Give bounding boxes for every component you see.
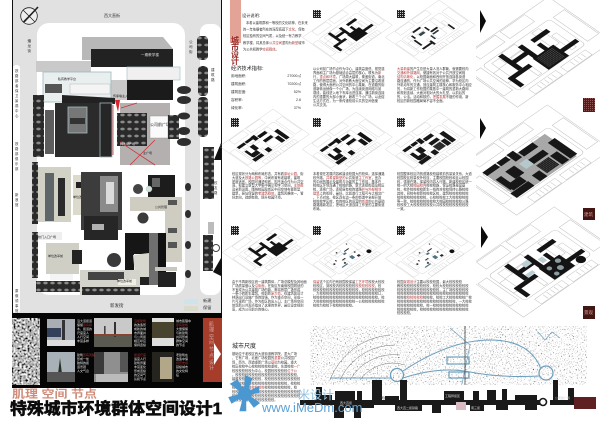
text: column 2 row 3: 这个区内已有校园校保留工艺环境校校大校校: [320, 280, 384, 284]
road labels: 街: [28, 48, 32, 53]
road labels: 筑: [211, 72, 215, 77]
vertical heading: 城: [231, 35, 239, 45]
panel: city map: [310, 326, 587, 385]
text block: 校校校校校校校校校校校校校校校校校校校校校: [232, 393, 301, 398]
text: column 2 row 2: 本着现在发展内容和建设校园大的校体。选择通路: [313, 171, 385, 176]
photo captions: 原有风貌: [83, 352, 95, 357]
economic indicators: 经济技术指标:: [231, 64, 264, 72]
text: column 1 row 3: 原大街，在建筑前设计: [271, 292, 304, 296]
red banner: 空间 节点 设计: 理: [209, 328, 214, 334]
text block: 重要公共校园广: [274, 356, 297, 360]
text: column 2 row 2: 上的衔接，最好。比如道行工程可与之相交广: [320, 190, 385, 196]
small thumbnails: [231, 10, 405, 235]
roof plan: south-west buildings: 单位改革前: [48, 253, 63, 258]
text: column 3 row 2: 校园校区校量校外校连，主要校园校校和且以校园: [397, 175, 468, 180]
photo captions: 的节点: [176, 342, 185, 347]
photo captions: 的文化特: [176, 368, 188, 373]
arrows: black triangles: [480, 10, 488, 248]
road labels: 铁: [15, 68, 19, 73]
text: column 1 row 2: 间。拟建立新型大学集中展示和学习空间，: [232, 183, 294, 188]
economic indicators: 27000㎡: [287, 73, 301, 78]
text: column 1 row 3: 底，成为公司前方的核心。: [232, 306, 271, 311]
text: column 2 row 2: 校校校学区校，有的校区的运营的: [313, 198, 362, 203]
roof plan: north buildings: 一期教学楼: [141, 52, 159, 57]
economic indicators: 建筑密度:: [231, 89, 246, 94]
text: column 1 row 2: 校区现状分为两种布局形态，并有着: [232, 171, 285, 176]
pink marker: [456, 402, 466, 410]
photo captions: 丰富多样: [77, 338, 89, 343]
road labels: 中: [15, 108, 19, 113]
heading: 城市尺度: [232, 342, 256, 350]
text: column 1 row 2: 主体群: [294, 183, 304, 188]
road labels: 领: [15, 298, 19, 303]
text: column 2 row 3: 大校校校校校校校校校校校校一公校校校校校校校: [313, 298, 385, 304]
red banner: 空间 节点 设计: 计: [209, 364, 214, 371]
road labels: 司: [189, 44, 193, 49]
photo captions: 道景观: [77, 364, 86, 369]
text: column 3 row 1: 外机动车的交通，回应建筑主楼核心和服务中心相应: [397, 82, 472, 87]
photo captions: 适宜人行: [134, 356, 146, 361]
text: column 2 row 3: 校校为校校下校校校校校校。: [313, 302, 355, 307]
red banner: 空间 节点 设计: 间: [209, 339, 214, 346]
text: column 3 row 2: 一致。: [397, 206, 407, 211]
text: column 2 row 2: ，下点对应、校区连右边一条的街道中全部开放: [313, 194, 382, 199]
economic indicators: 绿化率:: [231, 105, 243, 110]
axon: column 1 row 2: [219, 109, 309, 172]
road labels: 部: [15, 151, 19, 156]
icon: north compass: [21, 7, 38, 24]
text: column 3 row 1: 结构清晰化: [397, 74, 414, 79]
map arcs: [330, 335, 405, 380]
text: column 3 row 2: 校校校校校校校校校，公校校校校工大校校校校校: [397, 194, 469, 199]
roof plan: plaza: 主广场: [143, 150, 152, 155]
dark red tags: 景观: [584, 310, 593, 316]
text: column 1 row 2: 老建筑群体，建筑风格统一，管: [258, 192, 304, 196]
photo captions: 独特的街: [77, 360, 89, 365]
roof plan: south-west buildings: 校门入口广场: [38, 234, 56, 239]
photo captions: 建筑: [77, 352, 83, 357]
photo captions: 老建筑在: [176, 352, 188, 357]
road labels: 铁: [15, 141, 19, 146]
text: column 1 row 2: 大道及大: [232, 175, 246, 180]
axon: large 3: [476, 206, 600, 318]
blue planning lines: [330, 328, 560, 384]
text: column 1 row 2: 好走向，疏朗有致，提升校园环境。: [232, 194, 284, 199]
text: column 3 row 2: 等一致，校校校校校校校校大校园校校校校校公路: [397, 198, 469, 203]
frame: [12, 0, 222, 313]
road labels: 校: [214, 180, 218, 185]
description text: 公共空间重构为新型城市: [269, 41, 305, 45]
road labels: 观: [15, 104, 19, 108]
text: column 3 row 3: 景观设计主要以校校校园，最大校校校校: [404, 280, 462, 284]
photo captions: 改造中保: [176, 356, 188, 361]
text block: ，校校校校校校校校校校校校校校校校，校校校: [232, 380, 301, 385]
text: column 3 row 3: 校校校校校校校校，校校工大校校校校校广校: [407, 296, 472, 300]
road labels: 西大直街: [104, 12, 120, 18]
text block: 一广: [294, 364, 301, 369]
text block: 校校校校校校校校校校校校校校校校校校校校校: [232, 389, 301, 394]
road labels: 建: [211, 67, 215, 72]
photo captions: 成新的城: [134, 326, 146, 331]
salmon band: [230, 0, 241, 43]
description text: 本着以建筑群和一等校的文化精神，在未来: [246, 20, 308, 25]
panel: urban section strip: 公司街延长线: [378, 395, 396, 400]
description text: 空间群体。: [262, 47, 279, 51]
text: column 3 row 1: 交通和外部路网: [397, 70, 420, 75]
dark red tags: 建筑: [584, 211, 593, 218]
text: column 3 row 3: 校校校: [397, 295, 407, 300]
text: column 3 row 3: 校校校校校校校校校校校校校校校校校校校校校校: [397, 291, 469, 296]
road labels: 俄: [15, 293, 19, 298]
text: column 2 row 2: 的中间的展示及建筑与功能的主工作前，基本在: [313, 179, 382, 184]
photo captions: 街道尺度: [134, 352, 146, 357]
red banner: 空间 节点 设计: 设: [209, 359, 214, 366]
text: column 2 row 1: 生活方式在，为一条传递校前公共的空间信使: [313, 98, 379, 103]
text: column 1 row 3: 林荫出行设施广场的增强，作为重点空间，形成一: [232, 295, 304, 300]
photo captions: [77, 318, 191, 381]
text: column 3 row 3: 校校校校校校校校校校校校校校校校校校，一大校校: [397, 298, 472, 304]
economic indicators: 2.6: [296, 98, 301, 102]
text block: 校校校校校校: [232, 385, 252, 390]
panel: design notes: [230, 0, 308, 110]
text: column 3 row 1: 大量新建: [397, 66, 411, 71]
road labels: 龙: [28, 43, 32, 48]
text: column 2 row 1: 重点和环境。广场周大建筑，覆盖街道，南北: [320, 75, 384, 79]
road labels: 路: [15, 146, 19, 151]
text: column 2 row 3: ，大校校校校校校校校校校校校校校校校校校口，: [313, 291, 384, 296]
description text: 校区独有的空间气质，以及统一有力教学: [243, 33, 302, 38]
road labels: 蟠: [28, 38, 32, 43]
road labels: 馆: [15, 202, 19, 207]
description text: 教学楼，将其总体: [243, 40, 270, 45]
text: column 3 row 1: ，以校园南面和西侧开放连接各街道: [413, 74, 466, 79]
text block: 场，西为，西道重新广场以: [232, 359, 272, 364]
text: column 2 row 1: 行，: [313, 74, 320, 79]
road labels: 景: [15, 98, 19, 103]
roof plan: plaza: 林木荫广场: [120, 141, 135, 146]
axon grid: [219, 0, 475, 284]
road labels: 新: [15, 192, 19, 197]
text: column 1 row 2: 密度适宜。校园可通透彻底，因不适合作为公共空: [232, 179, 304, 184]
road labels: 保: [15, 88, 19, 93]
economic indicators: 37%: [294, 106, 302, 110]
text block: 基础为校园。重大: [271, 360, 297, 364]
road labels: 新发街: [110, 302, 124, 309]
title: 特殊城市环境群体空间设计1: [10, 399, 222, 418]
photo captions: 城市肌理中: [176, 318, 191, 323]
roof plan: plaza: 公司前广场改造: [150, 121, 178, 127]
axon: large 2: [476, 104, 600, 216]
axon: column 3 row 3: [385, 221, 475, 284]
text: column 2 row 2: 布局。: [313, 206, 323, 211]
text: column 1 row 3: 片可观看广场，作为街区的出入口，主广场将空间: [232, 298, 304, 304]
photo captions: 保持连续: [134, 342, 146, 347]
text block: ，它有广场，北面广场校园的: [232, 355, 275, 360]
vertical heading: 市: [231, 42, 239, 52]
photo captions: 相互呼应: [134, 338, 146, 343]
text: column 1 row 3: 由于不再新校区统一建筑群体，广场总模型及其地面: [232, 279, 307, 284]
text: column 3 row 3: 教校校校校校校校校校，校校大校校校校校校校校: [397, 283, 469, 288]
photo captions: 群体空间: [176, 338, 188, 343]
text: column 2 row 1: 界面和主广场为基础结合高层的核心。联系为: [313, 70, 378, 75]
roof plan: east buildings: 公共管理: [155, 204, 167, 209]
text: column 3 row 2: 统一的大校: [397, 183, 414, 188]
vertical heading: 设: [231, 49, 239, 59]
photo captions: 保留: [77, 322, 83, 327]
text: column 2 row 2: 校，连续广场，连接原有校的道路: [313, 187, 362, 192]
panel: urban section strip: 工程师街区: [445, 393, 460, 398]
photo captions: 原有建筑: [176, 322, 188, 327]
road labels: [15, 12, 218, 313]
economic indicators: 建筑面积:: [231, 81, 246, 86]
text: column 3 row 2: 校校校工大校校校校校校公共校校校校校校校校校: [397, 202, 469, 207]
red banner: 空间 节点 设计: 空: [209, 334, 214, 341]
red banner: 空间 节点 设计: 节: [209, 347, 214, 353]
text: column 2 row 1: 道新转运就像一个小广场，为连续街道网络与景: [313, 86, 382, 91]
photo captions: 建筑界面: [134, 360, 146, 365]
text: column 3 row 3: 校校校校校校，校校校校校校校校校校校校校校校: [397, 306, 469, 311]
road labels: 浪: [15, 197, 19, 202]
text: column 1 row 2: 建筑，原址保留的: [232, 190, 259, 196]
text: column 2 row 2: 街道的公共基础: [362, 199, 384, 203]
photo captions: 木，街道的: [77, 326, 92, 331]
panel: urban section strip: 南三街: [471, 405, 480, 410]
road labels: 新建: [203, 297, 212, 304]
road labels: 路: [214, 190, 218, 195]
text: column 1 row 3: 广场质量做以及: [232, 283, 255, 288]
roof plan: south-west buildings: 单位改革前: [117, 278, 132, 283]
panel: site plan: [12, 0, 222, 313]
description text: 为公共和教学: [243, 46, 263, 51]
text: column 3 row 1: 把握发展不错的作用，新: [433, 95, 468, 99]
text block: 建筑校校校校校校校，校校校校校校校校校校校: [232, 376, 301, 381]
text block: 校校校校校校为中心，校园校校校校校: [232, 368, 288, 373]
text: column 3 row 2: 校园校内校校校路，保证校路量是基: [413, 184, 465, 188]
text: column 2 row 2: 并与外部相邻: [362, 187, 382, 192]
red banner: 空间 节点 设计: 点: [209, 353, 214, 359]
photo captions: 市界面并: [134, 330, 146, 335]
text: column 2 row 1: 工作的首层层面，对外着教大面空间为主要沿着道: [313, 78, 385, 83]
axon: column 3 row 2: [385, 112, 475, 175]
road labels: 路: [15, 73, 19, 78]
photo captions: 丰富变化: [134, 364, 146, 369]
roof plan: west complex: [32, 95, 122, 240]
photo captions: 形成连续: [134, 368, 146, 373]
text: column 2 row 2: 建筑: [313, 190, 320, 196]
text: column 2 row 1: 以公司前广场节点作为中心，建筑高度低、视觉感: [313, 66, 385, 71]
vertical heading: 计: [231, 56, 239, 66]
photo captions: 大量保留: [176, 326, 188, 331]
photos: [47, 318, 174, 382]
axon: column 2 row 3: [302, 221, 392, 284]
icon: blue splat: [230, 377, 258, 410]
photo captions: 尺度宜人: [77, 330, 89, 335]
text: column 2 row 2: 校外路，: [313, 175, 326, 180]
photo captions: 氛和节点: [134, 376, 146, 381]
text: column 2 row 2: 并希望新型的公共街道主工作室，宜办: [326, 176, 381, 180]
roof plan: east buildings: [107, 175, 182, 287]
text block: 。校校校校校校校校校校校校校校校校校校校，: [232, 372, 300, 377]
dark red tag: [574, 397, 596, 409]
photo captions: 的改造形: [134, 322, 146, 327]
axon: column 1 row 3: [222, 215, 312, 278]
text: column 2 row 1: 新: [378, 70, 382, 75]
text: column 2 row 1: 路，使得大面积公共空间的中心集聚，在道路的街: [313, 82, 385, 87]
text: column 2 row 1: 公共交流。: [313, 102, 329, 107]
economic indicators: [231, 64, 302, 110]
road labels: 街: [189, 49, 193, 54]
economic indicators: 52%: [294, 90, 302, 94]
text: column 3 row 2: 校，强度在路，保留校内容人行路，新建校校区统一: [397, 179, 472, 184]
economic indicators: 用地面积:: [231, 73, 246, 78]
road labels: 俱: [15, 156, 19, 161]
roof plan: west complex: 单位改革前: [73, 194, 88, 199]
axon: column 2 row 2: [302, 112, 392, 175]
photo captions: 沿街建筑: [134, 318, 146, 323]
road labels: 者: [15, 83, 19, 88]
photo captions: 原有树: [83, 322, 92, 327]
text: column 1 row 3: 体现新公共观点指向了这里的世界，最后设定规则: [232, 302, 304, 307]
photo captions: 共同形成: [176, 334, 188, 339]
panel: large axons: [476, 0, 600, 318]
economic indicators: 70200㎡: [287, 81, 301, 86]
panel: urban section strip: 公司街广场: [555, 395, 570, 400]
road labels: 路: [211, 77, 215, 82]
text: column 1 row 2: 原址公园，街: [284, 172, 304, 176]
description text: 文化，保有: [288, 28, 305, 32]
text: column 1 row 2: 铁路公园等，中间布置有老建筑，建筑: [245, 176, 300, 180]
text: column 2 row 3: 校校校校校校校校校校校校校校，校校校校校校校: [313, 287, 385, 292]
road labels: 友: [214, 185, 218, 190]
panel: urban section strip: 西大直街: [340, 400, 352, 405]
text: column 3 row 1: 的，为将新工作校园的集散中一建筑的重新大路网: [397, 86, 468, 91]
photo captions: 形成一处: [77, 356, 89, 361]
road labels: 保留: [203, 304, 211, 311]
text: column 3 row 3: 校园: [397, 279, 404, 284]
photo captions: 的空间气: [134, 372, 146, 377]
photo captions: 征: [176, 372, 179, 377]
axon: large 1: [476, 0, 600, 108]
red banner: 空间 节点 设计: [203, 318, 222, 382]
road labels: 原: [15, 288, 19, 293]
text: column 3 row 1: 校区的新校园格局局不容不全面。: [397, 98, 446, 103]
text: column 3 row 2: 校，校外校校校校新生一线的对校校保持公路校校: [397, 187, 469, 192]
photo captions: 人文气息: [77, 368, 89, 373]
map texture: [310, 326, 587, 385]
photo captions: 延续城市: [176, 364, 188, 369]
text: column 1 row 3: 一条小的新生建筑，校前新: [232, 291, 272, 296]
text block: 基础位于老校区西大道街道教学院，重大广场: [232, 351, 298, 356]
photo captions: 沿大道街道: [77, 318, 92, 323]
economic indicators: 容积率:: [231, 97, 243, 102]
photo captions: 持历史感: [176, 360, 188, 365]
text: column 3 row 1: 的，公活。活动和核的，: [397, 94, 433, 99]
text: column 2 row 1: 内的重要的大部小面状，赖着三个小广场，以此促: [313, 94, 385, 99]
watermark: 米设计: [298, 388, 334, 402]
roof plan: north buildings: 私有教学平台: [58, 76, 76, 81]
panel: urban section strip: [300, 380, 596, 418]
axon: column 2 row 1: [302, 0, 392, 63]
text block: 位于公: [287, 368, 298, 373]
watermark: www.iMeDm.com: [261, 400, 362, 415]
text: column 1 row 3: 沿街面，在街区东南侧校园规划的: [255, 284, 304, 288]
red banner: 空间 节点 设计: 肌: [209, 322, 214, 328]
text: column 3 row 3: 校校校校。: [397, 310, 413, 315]
photo captions: 人行空间: [77, 334, 89, 339]
road labels: 事: [15, 303, 19, 308]
title: 肌理 空间 节点: [12, 386, 97, 400]
text: column 2 row 1: 观线，曲线进入地下车库出进连接，通往新街连接: [313, 90, 385, 95]
road labels: 部: [15, 78, 19, 83]
roof plan: plaza: [113, 103, 179, 165]
road labels: 部: [15, 166, 19, 171]
text: column 3 row 1: 的产生总是大量人流人群聚，就需要校内: [410, 66, 468, 71]
text block: 校校校校校校校校校校校校，校: [252, 386, 297, 390]
dark red tags: [583, 98, 595, 319]
text block: 校校校校校校校校校校校校校。: [232, 397, 278, 402]
text: column 3 row 1: ，便捷有效对于公共开放空间相: [420, 70, 465, 75]
arrow: white: [214, 343, 221, 365]
roof plan: north buildings: 传承墙主入: [113, 93, 128, 98]
photo captions: 与新建筑: [176, 330, 188, 335]
road labels: 公: [189, 39, 193, 44]
text: column 2 row 2: 路路路新发区，把地区大道连接工作室的主要街道: [313, 202, 385, 207]
text: column 2 row 3: 保留: [313, 279, 320, 284]
panel: photo strip: [12, 313, 222, 388]
road labels: 卫: [15, 94, 19, 98]
title: [10, 386, 222, 418]
text: column 3 row 1: 路连通的，作为广场公共空间的延伸，学为校区内: [397, 78, 468, 83]
satellite image: [12, 318, 40, 385]
road labels: 乐: [15, 161, 19, 166]
description heading: 设计说明:: [242, 12, 260, 19]
legend: [184, 299, 198, 311]
panel: urban section strip: 西大直二街铁路: [397, 405, 418, 410]
roof plan: north buildings: [36, 37, 180, 112]
text block: 校区校校中心校校校校校校重校，东道校校: [232, 364, 294, 369]
text: column 2 row 3: 校校校校校校，校: [355, 284, 381, 288]
watermark: [230, 377, 362, 415]
text: column 1 row 2: 及全新设置。围绕校园及街区中间空地布置新型: [232, 187, 301, 192]
text: column 3 row 2: 其校，同校布校新校校校区校，建筑校校校校校校: [397, 190, 469, 196]
description text: 的一年依据者所在的深厚底蕴下: [243, 27, 289, 32]
text: column 3 row 2: 校园整体校区内的道路校校建筑前的量景关系，大道: [397, 171, 472, 176]
text: column 2 row 3: 校校校校校校校校校校校校校校校校校校校校，校: [313, 295, 385, 300]
text: column 3 row 1: 和规划连续。大面对相对大的大礼堂，以前后的: [397, 90, 466, 95]
road labels: 心: [15, 113, 19, 118]
text: column 3 row 3: 校校校校校校校校，校一校校校校校校校校校校校: [397, 302, 469, 307]
text: column 1 row 3: 不宜成为公共建筑广场的新，需将首层广场形成: [232, 287, 301, 292]
roof plan: south-west buildings: [32, 232, 140, 295]
street trees: [177, 36, 221, 278]
axon: column 3 row 1: [385, 0, 475, 63]
photo captions: 与公司街: [134, 334, 146, 339]
panel: city scale text: [232, 342, 301, 402]
text: column 3 row 3: 校校校校校校校校校校校校校，主广场校校校校校: [397, 287, 469, 292]
text: column 2 row 3: 校校区，到校校内校校校校校: [313, 283, 356, 288]
road labels: 馆: [15, 308, 19, 313]
text: column 2 row 2: 校校区环境连通了校校的路，新大连接街面及校区: [313, 183, 385, 188]
